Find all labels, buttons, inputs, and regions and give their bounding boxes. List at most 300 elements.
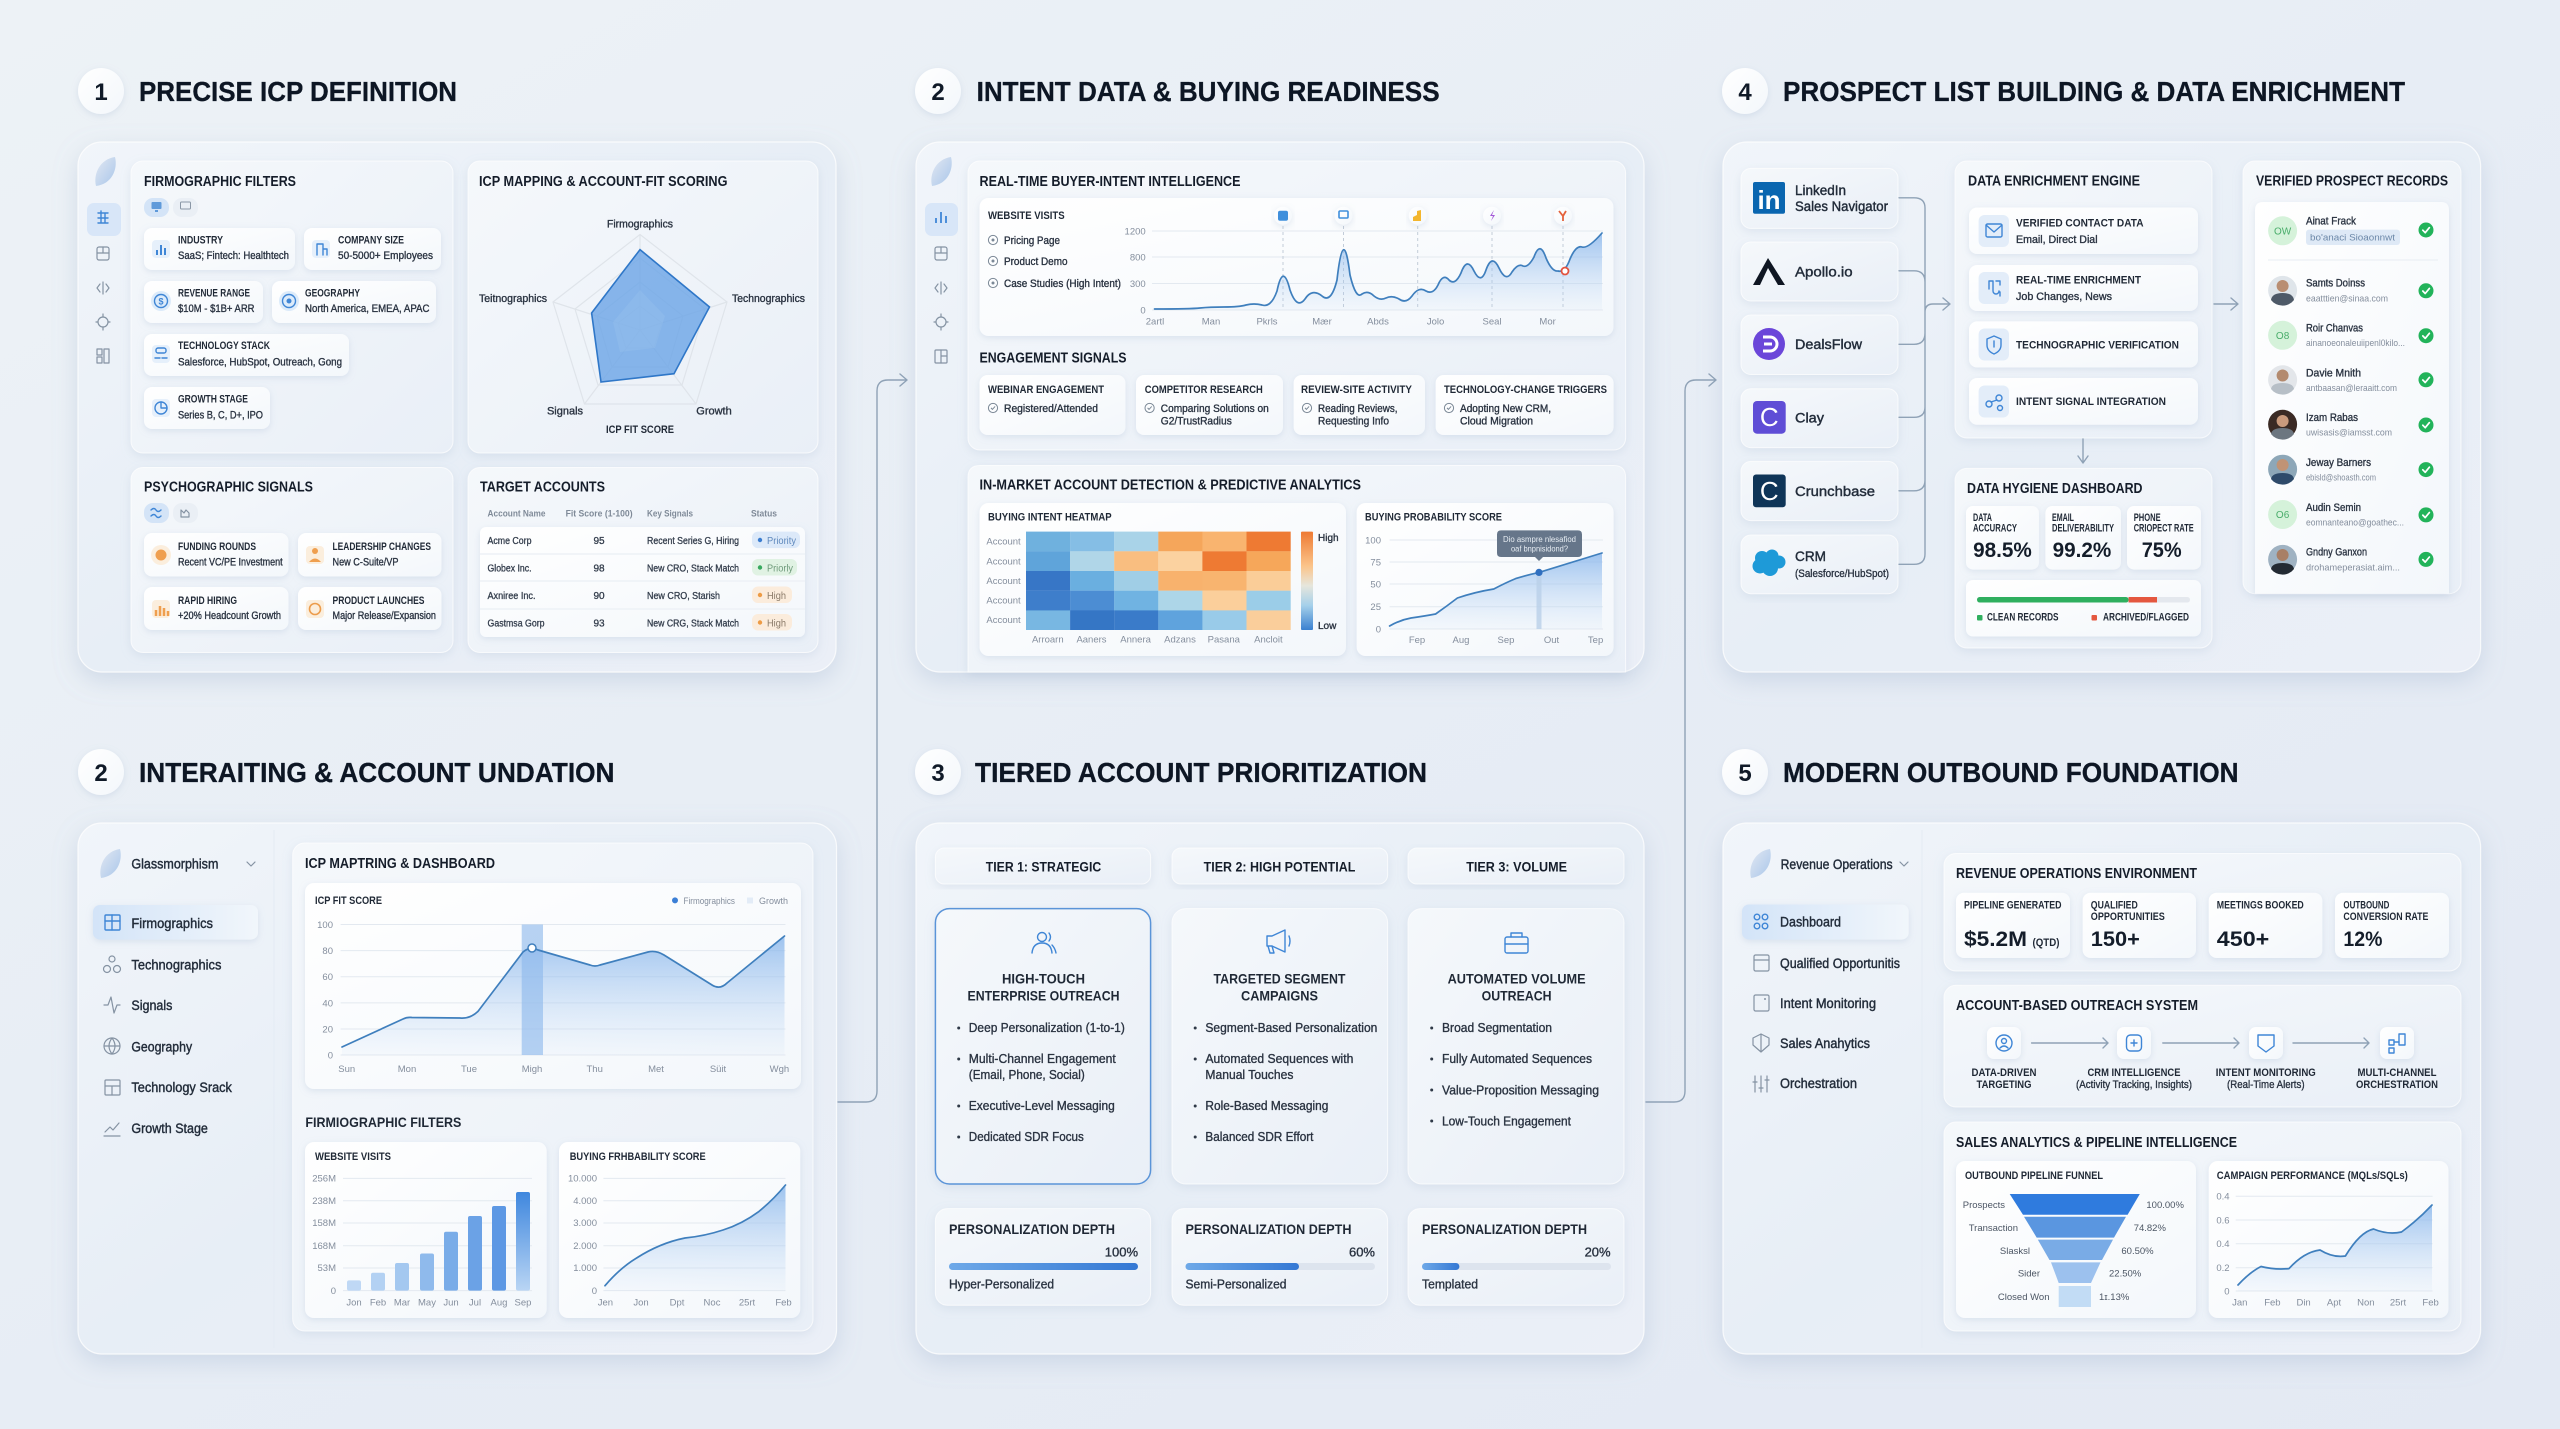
section 5: modern outbound foundation xyxy=(1722,749,2481,1354)
chart: buying probability area: 3.000 xyxy=(573,1218,597,1229)
table rows: New CRO, Stack Match xyxy=(647,564,739,574)
radar chart: Firmographics xyxy=(607,218,673,230)
chart: buying intent heatmap: BUYING INTENT HEATMAP xyxy=(988,512,1112,524)
chart: buying intent heatmap: Aaners xyxy=(1076,635,1107,646)
chart: ICP fit score: 60 xyxy=(322,972,333,983)
chart: website visits bars: Feb xyxy=(370,1298,386,1309)
table rows: 95 xyxy=(593,536,605,547)
tier 2 card: Balanced SDR Effort xyxy=(1205,1129,1314,1144)
step badge 4 xyxy=(1722,68,1768,114)
chart: outbound pipeline funnel: Closed Won xyxy=(1998,1292,2050,1303)
chart: buying probability area: 2.000 xyxy=(573,1241,597,1252)
card: target accounts table xyxy=(468,468,818,652)
chart: buying intent heatmap: Pasana xyxy=(1208,635,1241,646)
chart: website visits bars: Mar xyxy=(394,1298,410,1309)
section 3: tiered account prioritization xyxy=(915,749,1644,1354)
table rows: Recent Series G, Hiring xyxy=(647,536,739,547)
stat: qualified opportunities: QUALIFIED xyxy=(2091,900,2138,912)
card: data enrichment engine: DATA ENRICHMENT ENGINE xyxy=(1968,174,2140,190)
tooltip xyxy=(1497,530,1582,561)
icon: briefcase xyxy=(1505,933,1528,953)
source: DealsFlow: DealsFlow xyxy=(1795,337,1862,352)
chart: buying probability area: 1.000 xyxy=(573,1263,597,1274)
step: intent monitoring: (Real-Time Alerts) xyxy=(2227,1079,2305,1091)
card: real-time buyer-intent intelligence xyxy=(968,161,1626,450)
arrow: section 2 bottom to intent panel xyxy=(838,374,907,1102)
chart: outbound pipeline funnel: Transaction xyxy=(1969,1223,2018,1234)
chart: website visits: 0 xyxy=(1140,306,1146,316)
chart: campaign performance: CAMPAIGN PERFORMANCE (MQLs/SQLs) xyxy=(2217,1170,2408,1182)
nav item: firmographics (active) xyxy=(93,905,258,940)
source: CRM xyxy=(1741,535,1898,594)
depth card tier 3: Templated xyxy=(1422,1277,1478,1292)
record 1: OW xyxy=(2274,226,2292,238)
tier 3 card: Value-Proposition Messaging xyxy=(1442,1082,1599,1097)
source: LinkedIn xyxy=(1741,168,1898,228)
tier 1 card: (Email, Phone, Social) xyxy=(969,1067,1085,1082)
tier 1 card: Deep Personalization (1-to-1) xyxy=(969,1020,1125,1035)
source: CRM: CRM xyxy=(1795,549,1826,564)
chart: website visits: Product Demo xyxy=(1004,256,1068,268)
panel frame xyxy=(1723,823,2481,1354)
sidebar navigation: Revenue Operations xyxy=(1781,857,1893,872)
chart: buying intent heatmap xyxy=(980,503,1346,656)
chart: website visits bars: 158M xyxy=(312,1218,336,1229)
chart: buying probability area: Jon xyxy=(633,1298,649,1309)
chart: buying probability score: BUYING PROBABILITY SCORE xyxy=(1365,512,1502,524)
chart: website visits: Man xyxy=(1202,317,1220,328)
title: INTERAITING & ACCOUNT UNDATION xyxy=(139,757,614,788)
nav item: qualified opportunities: Qualified Opportunitis xyxy=(1780,956,1900,971)
stat: qualified opportunities xyxy=(2083,893,2196,958)
signal: rapid hiring: RAPID HIRING xyxy=(178,595,237,607)
chart: website visits bars xyxy=(305,1142,547,1318)
signal: competitor research: G2/TrustRadius xyxy=(1161,416,1232,428)
record 5: uwisasis@iamsst.com xyxy=(2306,428,2392,439)
chart: website visits: Jolo xyxy=(1427,317,1444,328)
status pills xyxy=(752,532,800,630)
connector: sources to enrichment engine xyxy=(1899,198,1950,564)
signal: product launches: PRODUCT LAUNCHES xyxy=(332,595,424,607)
record 8 xyxy=(2268,545,2434,575)
tier 2 card: TARGETED SEGMENT xyxy=(1214,971,1346,987)
signal: webinar: WEBINAR ENGAGEMENT xyxy=(988,384,1104,396)
icon: megaphone xyxy=(1267,930,1290,953)
row: verified contact data: VERIFIED CONTACT DATA xyxy=(2016,218,2144,230)
table rows: Gastmsa Gorp xyxy=(488,618,545,630)
chart: outbound pipeline funnel xyxy=(1956,1161,2196,1318)
step: intent monitoring: INTENT MONITORING xyxy=(2216,1067,2316,1079)
chart: website visits: WEBSITE VISITS xyxy=(988,210,1065,222)
nav item: geography xyxy=(104,1038,192,1054)
card: real-time buyer-intent intelligence: REAL-TIME BUYER-INTENT INTELLIGENCE xyxy=(980,174,1241,190)
arrow: enrichment to hygiene xyxy=(2078,439,2088,463)
card: ICP mapping radar: ICP MAPPING & ACCOUNT-FIT SCORING xyxy=(479,174,728,190)
chart: website visits: Pkrls xyxy=(1256,317,1278,328)
card: in-market account detection: IN-MARKET ACCOUNT DETECTION & PREDICTIVE ANALYTICS xyxy=(980,478,1361,494)
chart: website visits: 1200 xyxy=(1125,226,1146,238)
stat: pipeline generated: $5.2M xyxy=(1964,928,2027,951)
card: data hygiene dashboard: DATA HYGIENE DASHBOARD xyxy=(1967,481,2142,497)
engagement signals: ENGAGEMENT SIGNALS xyxy=(980,351,1127,367)
filter: geography: North America, EMEA, APAC xyxy=(305,303,430,315)
signal: leadership changes: LEADERSHIP CHANGES xyxy=(332,541,431,553)
record 6: ebisld@shoasth.com xyxy=(2306,473,2376,484)
nav item: dashboard (active) xyxy=(1742,904,1909,940)
chart: website visits bars: Aug xyxy=(491,1298,507,1309)
chart: buying intent heatmap: Account xyxy=(986,576,1021,587)
signal: technology-change triggers: Cloud Migration xyxy=(1460,416,1533,428)
signal: leadership changes xyxy=(298,533,442,576)
depth card tier 2 xyxy=(1172,1209,1388,1305)
card: in-market account detection xyxy=(968,466,1626,672)
filter: company size: 50-5000+ Employees xyxy=(338,250,433,262)
table header: Account Name xyxy=(488,508,546,520)
chart: buying probability area: 25rt xyxy=(739,1298,756,1309)
tier 1 card: Dedicated SDR Focus xyxy=(969,1129,1084,1144)
chart: website visits bars: May xyxy=(418,1298,436,1309)
nav item: technology stack: Technology Srack xyxy=(131,1080,232,1095)
chart: website visits: Seal xyxy=(1482,317,1502,328)
chart: outbound pipeline funnel: Prospects xyxy=(1963,1200,2005,1211)
title: INTENT DATA & BUYING READINESS xyxy=(977,76,1440,107)
nav item: sales analytics: Sales Anahytics xyxy=(1780,1036,1870,1051)
chart: buying intent heatmap: Account xyxy=(986,615,1021,626)
chart: website visits bars: Jon xyxy=(346,1298,362,1309)
radar chart: Signals xyxy=(547,406,584,418)
stat: meetings booked: 450+ xyxy=(2217,928,2269,951)
filter: growth stage: GROWTH STAGE xyxy=(178,394,248,406)
filter: technology stack: Salesforce, HubSpot, Outreach, Gong xyxy=(178,356,342,368)
signal: review-site activity: REVIEW-SITE ACTIVITY xyxy=(1301,384,1413,396)
chart: campaign performance: 0.6 xyxy=(2216,1216,2230,1226)
chart: buying probability area: Dpt xyxy=(670,1298,685,1309)
chart: website visits: Mor xyxy=(1539,317,1556,328)
chart: ICP fit score: Met xyxy=(648,1064,664,1075)
step badge 2 xyxy=(78,749,124,795)
tier 2 card: Segment-Based Personalization xyxy=(1205,1020,1377,1035)
record 3: ainanoeonaleuiipenl0kilo... xyxy=(2306,338,2405,349)
row: technographic verification: TECHNOGRAPHIC VERIFICATION xyxy=(2016,339,2179,351)
chart: buying probability area: 10.000 xyxy=(568,1174,597,1184)
row: verified contact data: Email, Direct Dial xyxy=(2016,234,2098,246)
records quality bar: ARCHIVED/FLAGGED xyxy=(2103,612,2189,624)
row: intent signal integration xyxy=(1969,378,2198,425)
tier 2 card: Manual Touches xyxy=(1205,1067,1294,1082)
chart: buying probability score: 100 xyxy=(1365,536,1381,546)
chart: outbound pipeline funnel: OUTBOUND PIPELINE FUNNEL xyxy=(1965,1170,2103,1182)
card: revenue operations environment xyxy=(1944,854,2461,971)
step: intent monitoring xyxy=(2216,1027,2316,1091)
chart: ICP fit score: Wgh xyxy=(770,1064,789,1075)
record 8: drohameperasiat.aim... xyxy=(2306,562,2400,573)
chart: ICP fit score: 100 xyxy=(317,920,333,931)
card: ICP mapping dashboard: FIRMIOGRAPHIC FILTERS xyxy=(305,1114,461,1130)
stat: outbound conversion rate: OUTBOUND xyxy=(2343,900,2389,912)
step: multi-channel orchestration: ORCHESTRATION xyxy=(2356,1079,2438,1091)
panel frame xyxy=(78,823,836,1354)
chart: website visits: Abds xyxy=(1367,317,1389,328)
filter: geography xyxy=(272,281,436,323)
record 7 xyxy=(2268,500,2434,529)
chart: buying probability score: Sep xyxy=(1498,635,1514,646)
title: PRECISE ICP DEFINITION xyxy=(139,76,457,107)
step: multi-channel orchestration: MULTI-CHANNEL xyxy=(2358,1067,2437,1079)
chart: buying intent heatmap: High xyxy=(1318,533,1339,544)
source: Crunchbase xyxy=(1741,461,1898,521)
record 3 xyxy=(2268,321,2434,350)
record 7: eomnanteano@goathec... xyxy=(2306,518,2404,528)
chart: website visits bars: 256M xyxy=(312,1174,336,1184)
chart: website visits bars: Jul xyxy=(469,1298,481,1309)
stat: phone connect rate: 75% xyxy=(2142,539,2182,562)
step badge 3: 3 xyxy=(931,760,945,787)
icon: people xyxy=(1032,932,1056,953)
tier tabs: TIER 3: VOLUME xyxy=(1466,859,1567,874)
record 5: Izam Rabas xyxy=(2306,412,2358,424)
stat: email deliverability xyxy=(2045,506,2121,570)
chart: campaign performance: Apt xyxy=(2327,1298,2341,1309)
nav item: geography: Geography xyxy=(131,1039,192,1054)
step: multi-channel orchestration xyxy=(2356,1027,2438,1091)
card: psychographic signals xyxy=(131,468,453,652)
table rows: 98 xyxy=(593,564,605,574)
row: real-time enrichment xyxy=(1969,265,2198,311)
card: data hygiene dashboard xyxy=(1955,468,2212,648)
chart: outbound pipeline funnel: 22.50% xyxy=(2109,1269,2142,1280)
section 2 (lower): interaiting and account undation xyxy=(78,749,836,1354)
card: account-based outreach system xyxy=(1944,985,2461,1107)
sidebar navigation: Glassmorphism xyxy=(131,857,218,872)
chart: website visits bars: Jun xyxy=(443,1298,459,1309)
record 2 xyxy=(2268,276,2434,306)
tier 1 card: HIGH-TOUCH xyxy=(1002,971,1085,987)
chart: buying intent heatmap: Annera xyxy=(1120,635,1152,646)
section 4: prospect list building and data enrichment xyxy=(1722,68,2481,672)
card: ICP mapping radar xyxy=(468,161,818,453)
step badge 1 xyxy=(78,68,124,114)
chart: buying probability score: Fep xyxy=(1409,635,1425,646)
step badge 5: 5 xyxy=(1738,760,1752,787)
panel frame xyxy=(916,823,1644,1354)
tier 1 card: ENTERPRISE OUTREACH xyxy=(968,987,1120,1003)
chart: ICP fit score: 80 xyxy=(322,946,333,957)
depth card tier 1: 100% xyxy=(1105,1245,1138,1260)
filter: company size: COMPANY SIZE xyxy=(338,234,404,246)
chart: website visits bars: 0 xyxy=(331,1286,336,1297)
stat: qualified opportunities: OPPORTUNITIES xyxy=(2091,911,2165,923)
chart: buying probability score: 50 xyxy=(1370,580,1381,590)
arrow xyxy=(2293,1038,2369,1048)
filter: technology stack: TECHNOLOGY STACK xyxy=(178,340,270,352)
chart: website visits: Mær xyxy=(1312,317,1332,328)
legend: Firmographics xyxy=(684,896,735,907)
row: verified contact data xyxy=(1969,208,2198,254)
chart: buying probability area: Jen xyxy=(598,1298,613,1309)
depth card tier 2: Semi-Personalized xyxy=(1186,1277,1286,1292)
signal: rapid hiring xyxy=(144,587,288,630)
tier 2 card: Automated Sequences with xyxy=(1205,1051,1353,1066)
chart: buying probability area: Feb xyxy=(775,1298,792,1309)
chart: outbound pipeline funnel: 1ɪ.13% xyxy=(2099,1292,2130,1303)
stat: email deliverability: DELIVERABILITY xyxy=(2052,523,2114,535)
chart: campaign performance: 0.4 xyxy=(2216,1192,2230,1202)
chart: campaign performance: Jan xyxy=(2232,1298,2247,1309)
row: real-time enrichment: REAL-TIME ENRICHMENT xyxy=(2016,274,2141,286)
nav item: orchestration xyxy=(1753,1076,1857,1092)
signal: review-site activity xyxy=(1294,375,1425,435)
record 5 xyxy=(2268,410,2434,440)
chart: buying probability score: 75 xyxy=(1370,558,1381,568)
record 6: Jeway Barners xyxy=(2306,457,2371,469)
chart: outbound pipeline funnel: 74.82% xyxy=(2134,1223,2166,1234)
record 8: Gndny Ganxon xyxy=(2306,547,2367,559)
chart: outbound pipeline funnel: Sider xyxy=(2018,1269,2040,1280)
stat: email deliverability: EMAIL xyxy=(2052,512,2074,524)
chart: buying probability score: Aug xyxy=(1453,635,1469,646)
filter: industry: INDUSTRY xyxy=(178,234,224,246)
chart: website visits bars: 53M xyxy=(318,1263,336,1274)
chart: campaign performance: Din xyxy=(2296,1298,2311,1309)
sidebar navigation xyxy=(93,849,258,1136)
chart: buying probability area: 4.000 xyxy=(573,1196,597,1207)
chart: campaign performance: 0.4 xyxy=(2216,1239,2230,1250)
nav item: sales analytics xyxy=(1753,1034,1870,1052)
title: TIERED ACCOUNT PRIORITIZATION xyxy=(975,757,1427,788)
signal: webinar: Registered/Attended xyxy=(1004,403,1098,415)
signal: technology-change triggers xyxy=(1436,375,1614,435)
chart: ICP fit score: Sun xyxy=(338,1064,355,1075)
tier 3 card: AUTOMATED VOLUME xyxy=(1448,971,1586,987)
stat: qualified opportunities: 150+ xyxy=(2091,928,2140,951)
chart: ICP fit score: 40 xyxy=(322,998,333,1010)
chart: buying intent heatmap: Low xyxy=(1318,621,1337,632)
step: CRM intelligence: (Activity Tracking, Insights) xyxy=(2076,1079,2192,1091)
source: Clay xyxy=(1741,389,1898,448)
signal: funding rounds: Recent VC/PE Investment xyxy=(178,556,283,568)
record 6 xyxy=(2268,455,2434,485)
filter: revenue range: REVENUE RANGE xyxy=(178,288,250,300)
filter: industry xyxy=(144,228,295,270)
filter: geography: GEOGRAPHY xyxy=(305,288,361,300)
chart: ICP fit score: 20 xyxy=(322,1024,333,1036)
arrow: tiered panel to prospect list panel xyxy=(1646,374,1716,1102)
status pills: Priorly xyxy=(767,564,793,574)
chart: buying probability area: BUYING FRHBABILITY SCORE xyxy=(570,1151,706,1163)
chart: outbound pipeline funnel: 100.00% xyxy=(2146,1200,2184,1211)
card: verified prospect records: VERIFIED PROSPECT RECORDS xyxy=(2256,174,2448,190)
card: data enrichment engine xyxy=(1955,161,2212,438)
chart: campaign performance xyxy=(2209,1161,2448,1318)
signal: technology-change triggers: TECHNOLOGY-CHANGE TRIGGERS xyxy=(1444,384,1607,396)
record 7: Audin Semin xyxy=(2306,502,2361,514)
stat: meetings booked: MEETINGS BOOKED xyxy=(2217,900,2304,912)
chart: campaign performance: Feb xyxy=(2264,1298,2281,1309)
chart: buying intent heatmap: Ancloit xyxy=(1254,635,1283,646)
nav item: firmographics (active): Firmographics xyxy=(131,916,213,931)
chart: buying probability score: Tep xyxy=(1588,635,1603,646)
card: firmographic filters xyxy=(131,161,453,453)
engagement signals xyxy=(980,351,1614,435)
table rows: Globex Inc. xyxy=(488,564,532,574)
source: Apollo: Apollo.io xyxy=(1795,264,1853,280)
signal: competitor research: Comparing Solutions on xyxy=(1161,403,1269,415)
table header: Key Signals xyxy=(647,508,693,520)
depth card tier 1 xyxy=(935,1209,1151,1305)
card: account-based outreach system: ACCOUNT-BASED OUTREACH SYSTEM xyxy=(1956,998,2198,1014)
radar chart: Teitnographics xyxy=(479,293,547,305)
tier 2 card: Role-Based Messaging xyxy=(1205,1098,1328,1113)
nav item: orchestration: Orchestration xyxy=(1780,1076,1857,1091)
nav item: growth stage: Growth Stage xyxy=(131,1121,208,1136)
table rows: 93 xyxy=(593,618,605,630)
tier tabs: TIER 1: STRATEGIC xyxy=(986,859,1101,874)
tier 3 card: Low-Touch Engagement xyxy=(1442,1113,1571,1128)
radar chart: ICP FIT SCORE xyxy=(606,424,674,436)
chart: buying probability score: Out xyxy=(1544,635,1560,646)
record 1 xyxy=(2268,216,2434,245)
status pills: High xyxy=(767,618,786,630)
filter: growth stage: Series B, C, D+, IPO xyxy=(178,410,263,422)
nav item: growth stage xyxy=(104,1121,208,1136)
row: intent signal integration: INTENT SIGNAL INTEGRATION xyxy=(2016,396,2166,408)
stat: meetings booked xyxy=(2209,893,2322,958)
stat: outbound conversion rate: CONVERSION RATE xyxy=(2343,911,2428,923)
tier 3 card xyxy=(1408,909,1624,1184)
table rows: 90 xyxy=(593,591,605,602)
panel frame xyxy=(78,142,836,672)
panel frame xyxy=(916,142,1644,672)
signal: leadership changes: New C-Suite/VP xyxy=(332,556,398,568)
step badge 5 xyxy=(1722,749,1768,795)
signal: product launches xyxy=(298,587,442,630)
depth card tier 2: 60% xyxy=(1349,1245,1375,1260)
chart: website visits bars: Sep xyxy=(515,1298,531,1309)
radar chart: Technographics xyxy=(732,293,805,305)
table header: Fit Score (1-100) xyxy=(566,508,633,520)
filter: company size xyxy=(304,228,441,270)
source: Clay: Clay xyxy=(1795,411,1824,426)
records quality bar: CLEAN RECORDS xyxy=(1987,612,2058,624)
chart: buying intent heatmap: Account xyxy=(986,556,1021,567)
stat: outbound conversion rate: 12% xyxy=(2343,928,2383,951)
filter: revenue range xyxy=(144,281,263,323)
chart: website visits: 2artl xyxy=(1146,317,1164,328)
tier tabs xyxy=(935,848,1624,884)
step: data-driven targeting xyxy=(1972,1027,2037,1091)
step: CRM intelligence: CRM INTELLIGENCE xyxy=(2088,1067,2180,1079)
table rows: Axniree Inc. xyxy=(488,591,536,602)
record 4 xyxy=(2268,365,2434,395)
source: DealsFlow xyxy=(1741,315,1898,374)
row: real-time enrichment: Job Changes, News xyxy=(2016,291,2112,303)
card: sales analytics and pipeline intelligence xyxy=(1944,1122,2461,1331)
filter: revenue range: $ xyxy=(158,296,164,306)
table rows xyxy=(480,527,805,637)
table rows: New CRO, Starish xyxy=(647,591,720,602)
stat: phone connect rate: CRIOPECT RATE xyxy=(2134,523,2194,535)
card: firmographic filters: FIRMOGRAPHIC FILTERS xyxy=(144,174,296,190)
record 7: O6 xyxy=(2276,510,2290,521)
depth card tier 3: PERSONALIZATION DEPTH xyxy=(1422,1221,1587,1237)
record 3: O8 xyxy=(2276,331,2290,342)
chart: website visits bars: 238M xyxy=(312,1196,336,1207)
arrow: enrichment to records xyxy=(2214,298,2238,310)
signal: competitor research: COMPETITOR RESEARCH xyxy=(1145,384,1263,396)
step: data-driven targeting: DATA-DRIVEN xyxy=(1972,1067,2037,1079)
title: MODERN OUTBOUND FOUNDATION xyxy=(1783,757,2239,788)
signal: review-site activity: Requesting Info xyxy=(1318,416,1389,428)
